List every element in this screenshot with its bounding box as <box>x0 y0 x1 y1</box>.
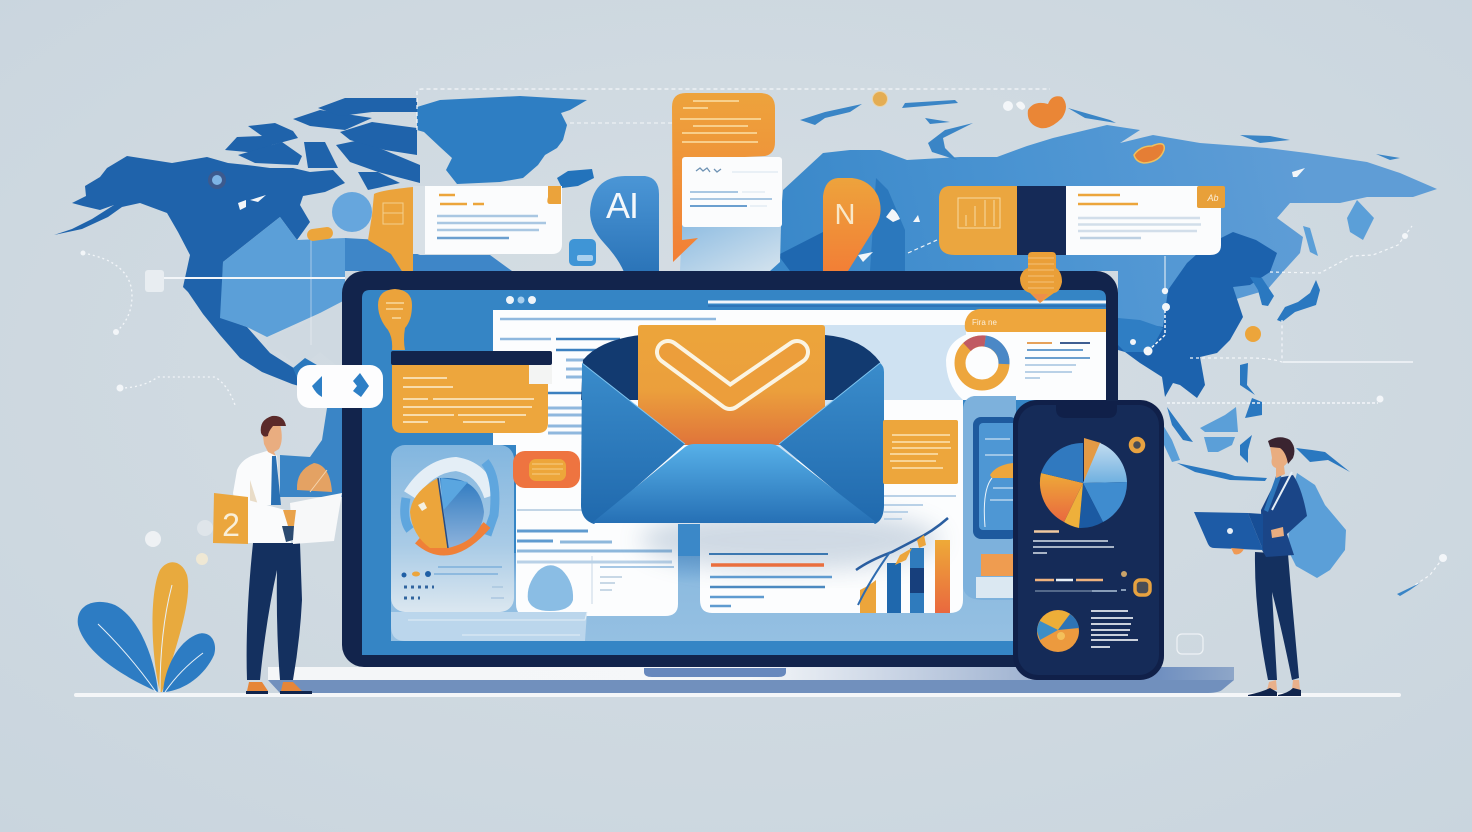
map: Central and South America <box>280 408 345 497</box>
icon: chevron <box>668 352 797 398</box>
card: top left orange bubble and white card <box>368 186 562 287</box>
phone text lines <box>1034 530 1059 533</box>
map: Eurasia <box>680 125 1437 353</box>
shirt <box>233 450 280 505</box>
shoes <box>247 682 302 691</box>
icon: small marker <box>1121 571 1127 577</box>
pill: white with arrows <box>297 365 383 408</box>
card: white <box>425 186 562 254</box>
label: 2: 2 <box>222 507 240 543</box>
ground line <box>74 693 1401 697</box>
folder: white pages <box>248 500 291 543</box>
floating dots <box>145 520 213 565</box>
map: Borneo and Sulawesi <box>1163 200 1374 462</box>
trousers <box>247 543 302 680</box>
hand on hip <box>1271 527 1284 538</box>
map: USA lighter region <box>220 217 345 337</box>
shoes <box>1267 680 1300 690</box>
header: orange <box>965 309 1106 332</box>
map: Iceland <box>557 169 594 188</box>
map: China and South East Asia <box>1118 232 1277 398</box>
phone: body <box>1013 400 1164 680</box>
dashed route lines <box>83 89 1443 585</box>
document text lines <box>500 319 716 339</box>
card: tall orange message with white note <box>672 93 782 271</box>
small outline rectangle <box>1177 634 1203 654</box>
head <box>262 423 282 456</box>
map: Pacific islands <box>1167 226 1320 481</box>
map: Australia and Papua <box>1288 473 1346 578</box>
phone list lines <box>1091 611 1138 647</box>
map: Europe dark <box>778 232 823 271</box>
icon: zigzag glyph <box>696 168 721 172</box>
icon: document outline <box>383 203 403 224</box>
fold: pale paper <box>680 225 781 271</box>
map: Greenland <box>417 96 587 184</box>
panel: pale chart card lower layer <box>391 612 587 641</box>
folder: orange <box>213 493 248 544</box>
marker: orange coin top <box>872 92 888 106</box>
laptop <box>268 252 1234 693</box>
globe badge <box>297 463 332 492</box>
marker: orange coin by Japan <box>1245 326 1261 342</box>
text lines <box>439 195 484 204</box>
bubble: orange pointer <box>368 187 413 287</box>
map pins and markers <box>80 92 1447 562</box>
panel: pale blue behind envelope <box>700 325 966 460</box>
leaf: blue left <box>78 602 158 692</box>
plant <box>78 562 215 692</box>
orange connector above laptop <box>1020 252 1062 303</box>
icon: ring top <box>1131 439 1143 451</box>
laptop: frame <box>342 271 1118 667</box>
person: left man <box>213 416 342 694</box>
chart: orange arc <box>418 525 487 551</box>
bubble: AI <box>590 176 659 289</box>
map: gulf <box>266 300 345 372</box>
text lines <box>1027 342 1052 344</box>
leaf: blue right <box>163 633 215 692</box>
panel: navy divider <box>1017 186 1066 255</box>
panel: white document main <box>493 310 1106 616</box>
marker: orange heart shape <box>1028 96 1066 128</box>
connector: orange base <box>621 272 659 289</box>
card: donut panel: Fira ne <box>972 318 997 327</box>
tag: Ab <box>1197 186 1225 208</box>
envelope: right flap <box>779 363 884 524</box>
screen: pale lower band <box>391 553 1031 641</box>
laptop: base upper <box>268 667 1234 680</box>
envelope <box>581 325 884 524</box>
chart: phone pie <box>1040 438 1127 528</box>
chart: ring segments <box>410 464 491 496</box>
laptop: notch <box>644 668 786 677</box>
header: navy <box>391 351 552 365</box>
world map <box>54 96 1437 596</box>
marker: route dots <box>80 101 1447 562</box>
marker: orange blob on Siberia <box>1134 144 1164 163</box>
hand under laptop <box>1231 548 1244 554</box>
marker: orange pill <box>306 226 334 242</box>
address bar <box>708 300 1106 304</box>
envelope: bottom flap <box>592 444 877 523</box>
card: orange tag <box>547 186 561 204</box>
marker: blue circular badge <box>332 192 372 232</box>
window controls <box>506 296 536 304</box>
icon: rounded ring <box>1135 580 1150 595</box>
card: orange note right <box>883 420 958 519</box>
pill: orange-red <box>513 451 580 488</box>
lines: panel text under envelope <box>709 554 832 606</box>
map: North America <box>54 98 420 388</box>
marker: white dots at top <box>1016 102 1025 110</box>
panel: white text <box>1066 186 1221 255</box>
icon: small blue badge <box>569 239 596 266</box>
body <box>392 365 548 433</box>
chart: donut <box>960 341 1004 385</box>
bubble: orange message <box>672 93 775 262</box>
marker: orange lamp pin <box>378 289 412 350</box>
icon: left arrow <box>312 376 322 397</box>
leaf: orange centre <box>152 562 188 692</box>
map: northern islands <box>800 100 1400 160</box>
laptop: base lower <box>268 680 1234 693</box>
hand and arm <box>283 510 296 526</box>
laptop: screen <box>362 290 1106 655</box>
head <box>1270 444 1288 478</box>
icon: right arrow <box>353 373 369 397</box>
chart: bars and trend line <box>856 518 950 613</box>
bubble: N <box>823 178 881 271</box>
panel: left chart card <box>391 445 514 612</box>
card: analytics strip <box>939 186 1225 255</box>
card: orange left note <box>391 351 552 433</box>
label: N: N <box>835 199 855 231</box>
person: right man <box>1194 437 1307 696</box>
icon: bar chart outline <box>958 198 1000 228</box>
hair <box>261 416 286 437</box>
tie and shirt <box>1264 474 1282 512</box>
trousers <box>1255 552 1299 680</box>
envelope shadow <box>640 510 940 570</box>
chart: small pie <box>1037 610 1079 652</box>
jacket <box>1261 475 1307 557</box>
panel: blob card details <box>528 565 573 611</box>
laptop logo <box>1227 528 1233 534</box>
panel: orange chart <box>939 186 1017 255</box>
envelope: dark back <box>581 335 884 400</box>
laptop <box>1194 512 1263 550</box>
label: AI: AI <box>606 185 638 226</box>
phone <box>1013 385 1164 680</box>
marker: left square <box>145 270 164 292</box>
pin: location target <box>208 171 226 189</box>
card: analytics strip: Ab <box>1206 193 1219 203</box>
chart: legend <box>402 567 504 598</box>
phone: notch <box>1056 400 1117 418</box>
chart: left pie <box>410 478 484 548</box>
envelope: left flap <box>581 363 685 524</box>
card: donut panel <box>946 309 1106 400</box>
tablet behind phone <box>963 396 1018 600</box>
hair <box>1268 437 1294 464</box>
card: white note <box>682 157 782 227</box>
tie <box>271 456 281 505</box>
envelope: letter <box>638 325 825 445</box>
map: eastern North America <box>345 238 512 271</box>
